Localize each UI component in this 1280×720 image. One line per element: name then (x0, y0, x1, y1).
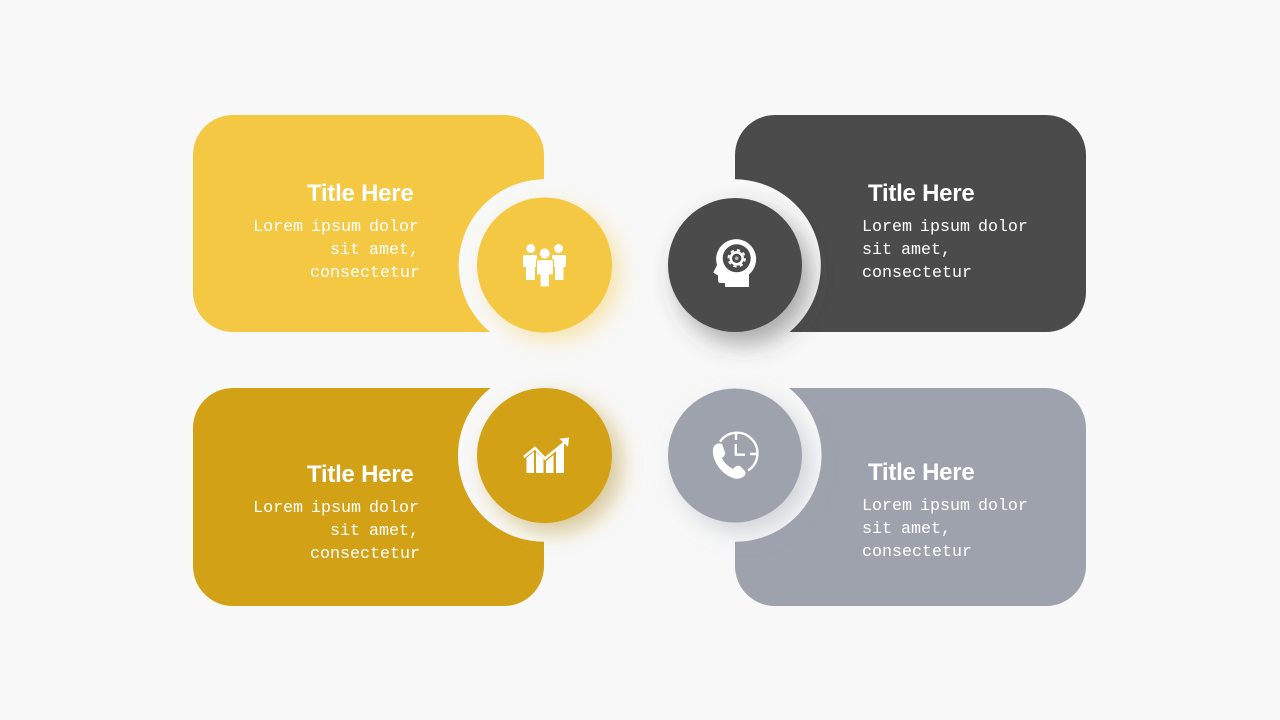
heading: bottom right: Title Here (868, 459, 974, 486)
text block: bottom right (862, 497, 1028, 562)
circle: gold (477, 388, 612, 523)
text block: top left (253, 218, 420, 283)
icon: phone and clock (713, 433, 757, 479)
circle: grey (668, 388, 802, 522)
text block: top right: consectetur (862, 264, 972, 283)
text block: top left: Lorem ipsum dolor (253, 218, 419, 237)
heading: top right: Title Here (868, 180, 974, 207)
text block: bottom left: sit amet, (330, 522, 419, 541)
card: dark notched (735, 115, 1086, 332)
text block: bottom right: sit amet, (862, 520, 951, 539)
text block: top right: Lorem ipsum dolor (862, 218, 1028, 237)
panel: top right dark (668, 115, 1086, 332)
text block: top right (862, 218, 1028, 283)
card: grey notched (735, 388, 1086, 606)
circle: dark (668, 198, 802, 332)
icon: team of people (523, 244, 566, 287)
panel: top left yellow (193, 115, 612, 332)
card: gold notched (193, 388, 544, 606)
panel: bottom right grey (668, 388, 1086, 606)
text block: bottom left (253, 499, 420, 564)
text block: top left: consectetur (310, 264, 420, 283)
text block: bottom right: consectetur (862, 543, 972, 562)
card: yellow notched (193, 115, 544, 332)
heading: bottom left: Title Here (307, 461, 413, 488)
text block: top left: sit amet, (330, 241, 419, 260)
icon: head with gear (713, 239, 756, 287)
circle: yellow (477, 198, 612, 332)
text block: bottom left: consectetur (310, 545, 420, 564)
text block: bottom left: Lorem ipsum dolor (253, 499, 419, 518)
text block: top right: sit amet, (862, 241, 951, 260)
panel: bottom left gold (193, 388, 612, 606)
icon: rising bar chart (524, 438, 569, 473)
heading: top left: Title Here (307, 180, 413, 207)
text block: bottom right: Lorem ipsum dolor (862, 497, 1028, 516)
